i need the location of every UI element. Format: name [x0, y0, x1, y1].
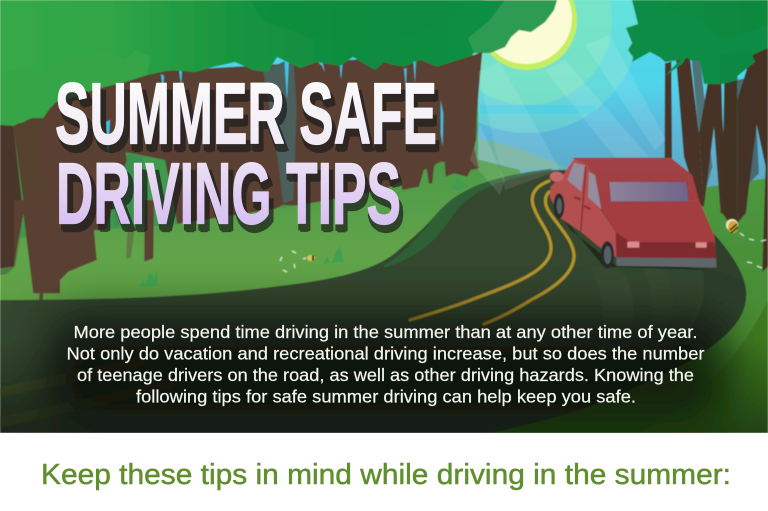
left tree canopy: [0, 0, 557, 125]
tail lights: [627, 242, 707, 248]
title shadow: [57, 72, 441, 250]
section heading: Keep these tips in mind while driving in the summer:: [41, 459, 731, 491]
wheels: [554, 193, 614, 269]
title shadow: DRIVING TIPS: [60, 154, 403, 250]
right tree trunks: [665, 47, 768, 272]
grass tufts: [139, 174, 468, 287]
wing mirror: [550, 172, 564, 182]
title shadow: SUMMER SAFE: [57, 72, 437, 169]
car: [550, 158, 716, 270]
bottom fade: [0, 340, 768, 433]
left background green behind trees: [0, 70, 478, 240]
car shadow: [566, 222, 703, 270]
ground left hill: [0, 160, 520, 301]
far hill: [478, 139, 570, 172]
door handles: [574, 197, 591, 209]
side windows: [567, 163, 601, 209]
intro paragraph: following tips for safe summer driving can help keep you safe.: [136, 386, 636, 406]
road: [0, 169, 746, 433]
sky: [208, 0, 766, 188]
sky slits between trunks: [105, 60, 344, 154]
dark fade behind intro text: [48, 315, 728, 420]
car tail panel: [616, 232, 716, 258]
car side: [550, 159, 616, 257]
rear window: [609, 182, 689, 202]
right lower green glow: [715, 302, 768, 432]
trunks above the right hill: [395, 52, 483, 190]
sun with halo: [472, 0, 639, 133]
car rear deck: [601, 200, 716, 258]
left tree trunks: [0, 54, 477, 231]
title line one: SUMMER SAFE: [55, 66, 437, 162]
intro paragraph: Not only do vacation and recreational driving increase, but so does the number: [66, 344, 705, 364]
left trunk bases over the ground: [0, 200, 154, 300]
light cloud band: [480, 105, 596, 114]
title line two: DRIVING TIPS: [56, 146, 401, 242]
title shadow: SUMMER SAFE: [61, 72, 441, 170]
bee right: [726, 219, 766, 268]
right tree canopy: [626, 0, 768, 84]
door line: [581, 167, 586, 232]
title shadow: DRIVING TIPS: [58, 152, 401, 249]
intro paragraph: More people spend time driving in the summer than at any other time of year.: [74, 322, 698, 342]
intro paragraph: [66, 322, 705, 406]
ground right: [490, 178, 768, 433]
light rays: [470, 35, 666, 195]
road centre lines: [0, 181, 574, 422]
title shadow: DRIVING TIPS: [62, 152, 405, 250]
title: [55, 66, 441, 250]
car roof and cabin: [572, 158, 699, 209]
bee left with dashed trail: [280, 251, 315, 272]
bumper: [616, 257, 716, 268]
intro paragraph: of teenage drivers on the road, as well as other driving hazards. Knowing the: [77, 365, 694, 385]
title shadow: SUMMER SAFE: [59, 74, 439, 170]
